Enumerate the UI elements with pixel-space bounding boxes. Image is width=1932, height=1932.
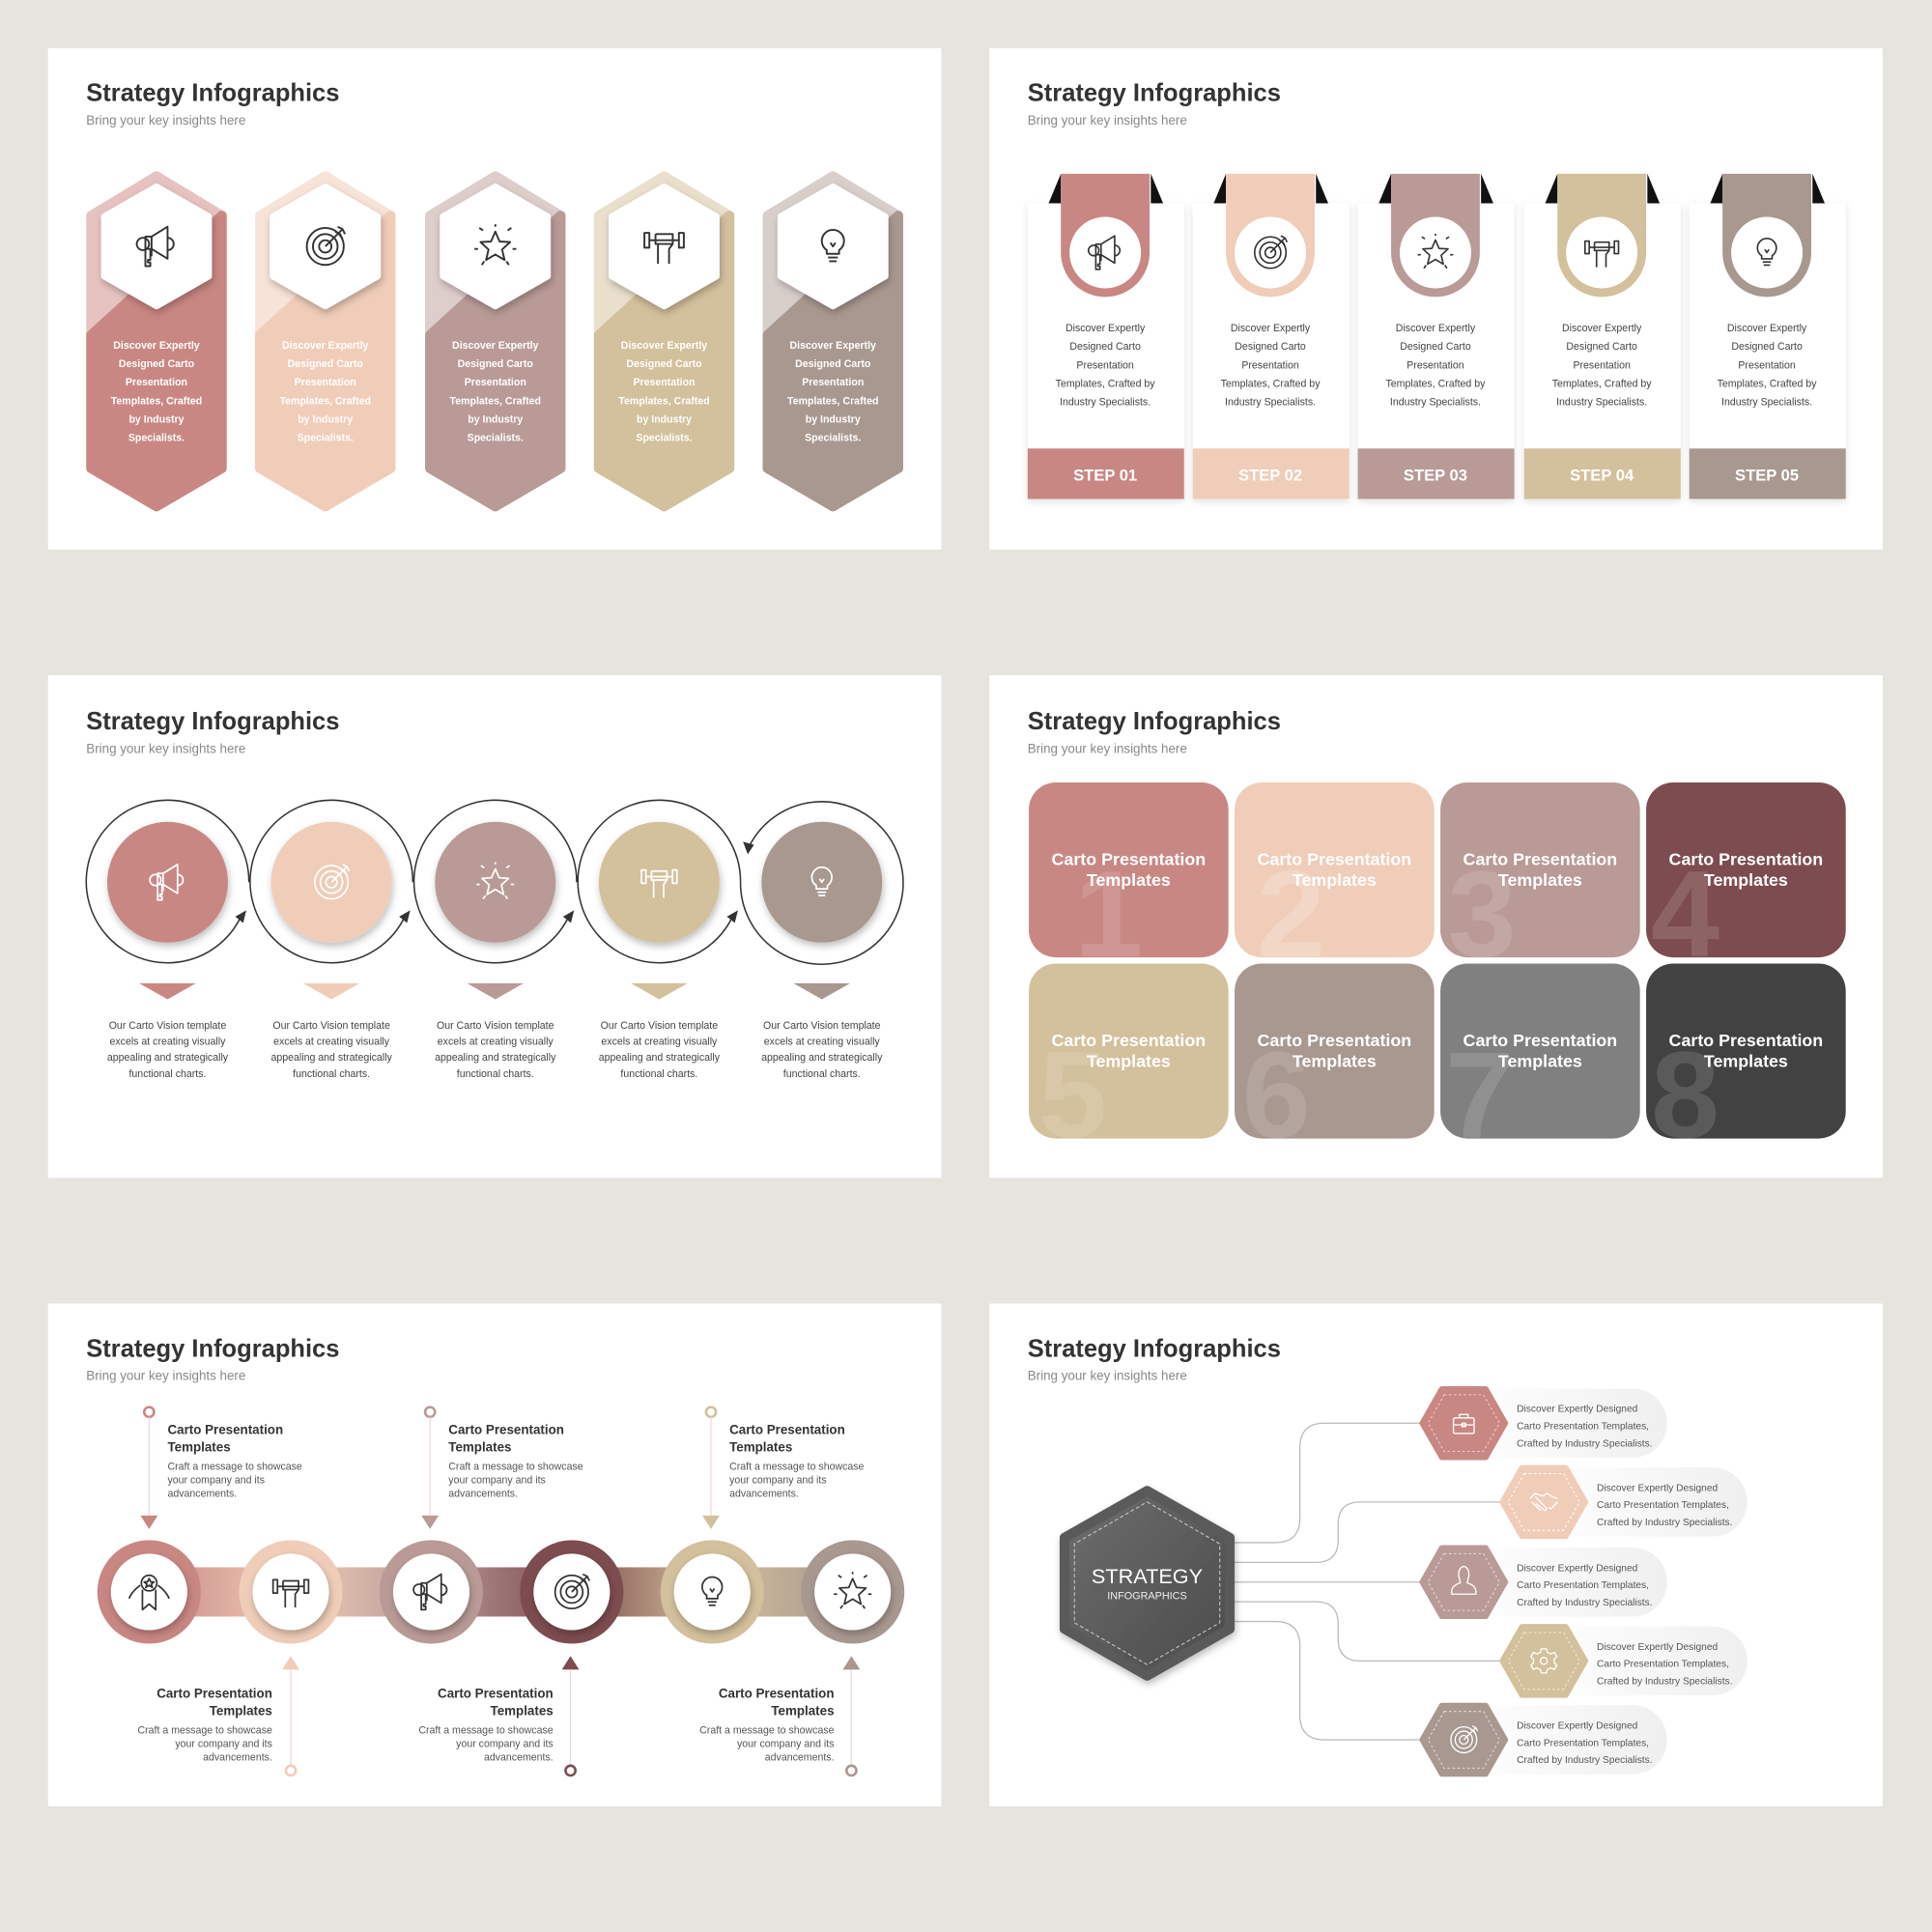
card 3: STEP 03 [1404,466,1467,484]
callout bottom 3: Carto Presentation [719,1687,835,1701]
hex 2: Presentation [295,377,356,388]
card 2: STEP 02 [1238,466,1302,484]
circle 5: Our Carto Vision template [763,1020,881,1032]
title: Strategy Infographics [86,708,339,735]
tile 8 [1646,963,1846,1164]
circle 2 [270,822,392,1080]
tile 5: Templates [1087,1052,1171,1071]
hex 2: Specialists. [298,433,354,444]
circle 5 [761,822,883,1080]
panel: numbered tiles [989,675,1883,1178]
item 2: Carto Presentation Templates, [1597,1500,1729,1511]
circle 2: functional charts. [293,1068,370,1080]
tile 3 [1440,782,1640,983]
chain band [149,1567,853,1616]
callout top 1: Carto Presentation [167,1423,283,1437]
callout top 1 [140,1407,302,1529]
hex 4: by Industry [637,414,692,426]
panel: hexagon columns [48,48,941,550]
tile 8: 8 [1651,1027,1719,1164]
hex 3: Designed Carto [458,358,533,370]
tile 4: Templates [1704,870,1788,890]
tile 2: 2 [1257,846,1325,983]
tile 6 [1235,963,1435,1164]
tile 4: 4 [1651,846,1719,983]
node 1 [98,1540,201,1644]
tile 2: Carto Presentation [1258,849,1411,868]
callout top 1: advancements. [167,1489,237,1500]
node 5 [661,1540,764,1644]
hex 4: Templates, Crafted [618,395,710,407]
tile 4: Carto Presentation [1669,849,1823,868]
subtitle: Bring your key insights here [1028,741,1187,755]
hex 3: Discover Expertly [452,340,539,352]
panel: circle cycle [48,675,941,1178]
circle 4: functional charts. [620,1068,697,1080]
item 5: Carto Presentation Templates, [1517,1738,1649,1748]
circle 1: appealing and strategically [107,1052,229,1064]
circle 3: appealing and strategically [435,1052,556,1064]
card 1 [1028,174,1184,499]
item 5 [1422,1705,1667,1775]
item 1: Crafted by Industry Specialists. [1517,1438,1653,1449]
card 3: Designed Carto [1400,341,1471,353]
callout bottom 2: your company and its [456,1739,554,1750]
circle 1: Our Carto Vision template [109,1020,226,1032]
tile 8: Carto Presentation [1669,1031,1823,1050]
hex 2: Templates, Crafted [280,395,371,407]
item 5: Crafted by Industry Specialists. [1517,1755,1653,1766]
callout top 1: your company and its [167,1475,265,1487]
item 2: Crafted by Industry Specialists. [1597,1518,1732,1528]
title: Strategy Infographics [86,80,339,107]
card 4: Presentation [1573,359,1631,371]
card 5 [1690,174,1846,499]
hex 2 [260,176,390,506]
tile 7: 7 [1445,1027,1514,1164]
tile 7: Carto Presentation [1463,1031,1617,1050]
tile 5: Carto Presentation [1052,1031,1206,1050]
circle 4: Our Carto Vision template [601,1020,718,1032]
circle 2: appealing and strategically [270,1052,392,1064]
hex 2: Designed Carto [288,358,363,370]
central hexagon: INFOGRAPHICS [1107,1591,1187,1603]
panel: timeline chain [48,1303,941,1806]
panel: strategy mind map [989,1303,1883,1806]
hex 5: Presentation [802,377,864,388]
hex 1: by Industry [128,414,185,426]
circle 3: functional charts. [457,1068,534,1080]
hex 1 [91,176,222,506]
callout bottom 3: Craft a message to showcase [699,1725,835,1737]
callout bottom 2: Templates [491,1704,554,1719]
central hexagon [1065,1491,1230,1676]
callout top 2: your company and its [448,1475,546,1487]
card 2: Discover Expertly [1231,323,1311,334]
tile 6: Templates [1293,1052,1377,1071]
hex 4: Presentation [633,377,696,388]
circle 3 [435,822,556,1080]
item 2: Discover Expertly Designed [1597,1483,1719,1493]
card 1: Designed Carto [1069,341,1141,353]
card 1: Discover Expertly [1065,323,1146,334]
circle 4: excels at creating visually [601,1037,718,1048]
callout bottom 3: Templates [771,1704,835,1719]
callout bottom 3: advancements. [765,1752,835,1764]
callout bottom 1: Craft a message to showcase [138,1725,272,1737]
hex 3: Specialists. [468,433,524,444]
panel: step cards [989,48,1883,550]
card 2 [1193,174,1350,499]
callout bottom 2 [418,1656,579,1776]
callout top 3 [702,1407,865,1529]
hex 3: Templates, Crafted [450,395,541,407]
callout top 1: Craft a message to showcase [167,1462,302,1473]
item 3: Discover Expertly Designed [1517,1563,1638,1574]
title: Strategy Infographics [1028,80,1281,107]
callout top 3: your company and its [729,1475,827,1487]
tile 3: 3 [1448,846,1517,983]
card 3: Presentation [1406,359,1464,371]
tile 7: Templates [1498,1052,1582,1071]
card 3: Discover Expertly [1396,323,1476,334]
card 1: STEP 01 [1073,466,1137,484]
node 2 [239,1540,343,1644]
card 5: Designed Carto [1731,341,1803,353]
item 3: Crafted by Industry Specialists. [1517,1598,1653,1608]
card 4: Designed Carto [1566,341,1637,353]
hex 3: by Industry [468,414,523,426]
callout bottom 1: Carto Presentation [156,1687,272,1701]
card 4: STEP 04 [1570,466,1634,484]
card 5: Industry Specialists. [1721,397,1812,409]
circle 1: excels at creating visually [109,1037,226,1048]
callout top 2: Carto Presentation [448,1423,564,1437]
tile 6: 6 [1242,1027,1311,1164]
card 1: Industry Specialists. [1060,397,1151,409]
hex 1: Presentation [126,377,187,388]
card 5: STEP 05 [1735,466,1799,484]
card 3 [1358,174,1515,499]
subtitle: Bring your key insights here [86,741,245,755]
title: Strategy Infographics [1028,708,1281,735]
circle 4 [599,822,721,1080]
item 1 [1422,1389,1667,1458]
callout top 3: advancements. [729,1489,799,1500]
tile 7 [1440,963,1640,1164]
hex 3 [430,176,560,506]
circle 3: Our Carto Vision template [437,1020,554,1032]
central hexagon: STRATEGY [1092,1564,1203,1588]
callout bottom 1 [138,1656,299,1776]
hex 5: by Industry [806,414,861,426]
hex 1: Discover Expertly [113,340,200,352]
item 4 [1502,1627,1747,1695]
card 1: Templates, Crafted by [1056,379,1155,390]
tile 4 [1646,782,1846,983]
item 2 [1502,1467,1747,1537]
subtitle: Bring your key insights here [86,113,245,128]
hex 4: Specialists. [636,433,693,444]
item 4: Crafted by Industry Specialists. [1597,1677,1732,1688]
subtitle: Bring your key insights here [1028,113,1187,128]
callout bottom 1: Templates [210,1704,272,1719]
callout bottom 2: Craft a message to showcase [418,1725,554,1737]
hex 2: Discover Expertly [282,340,369,352]
hex 3: Presentation [465,377,526,388]
item 1: Carto Presentation Templates, [1517,1422,1649,1433]
circle 1: functional charts. [128,1068,206,1080]
callout bottom 3: your company and its [737,1739,835,1750]
card 2: Templates, Crafted by [1221,379,1321,390]
hex 5: Designed Carto [795,358,871,370]
node 6 [801,1540,904,1644]
card 2: Industry Specialists. [1225,397,1316,409]
tile 3: Templates [1498,870,1582,890]
hex 4: Discover Expertly [621,340,707,352]
card 5: Presentation [1738,359,1796,371]
node 3 [380,1540,483,1644]
hex 1: Templates, Crafted [111,395,202,407]
tile 2 [1235,782,1435,983]
circle 3: excels at creating visually [438,1037,554,1048]
hex 4 [599,176,729,506]
callout top 2 [421,1407,583,1529]
tile 2: Templates [1293,870,1377,890]
tile 6: Carto Presentation [1258,1031,1411,1050]
circle 2: excels at creating visually [273,1037,390,1048]
title: Strategy Infographics [86,1335,339,1362]
callout top 2: Templates [448,1440,511,1455]
callout bottom 1: advancements. [203,1752,272,1764]
callout top 2: Craft a message to showcase [448,1462,583,1473]
item 5: Discover Expertly Designed [1517,1721,1638,1732]
callout bottom 2: advancements. [484,1752,554,1764]
hex 1: Designed Carto [119,358,195,370]
item 4: Carto Presentation Templates, [1597,1660,1729,1670]
node 4 [520,1540,623,1644]
card 2: Presentation [1241,359,1299,371]
card 2: Designed Carto [1235,341,1306,353]
hex 2: by Industry [298,414,353,426]
card 5: Templates, Crafted by [1718,379,1817,390]
card 4: Discover Expertly [1562,323,1642,334]
callout top 3: Craft a message to showcase [729,1462,865,1473]
circle 4: appealing and strategically [599,1052,721,1064]
card 3: Industry Specialists. [1390,397,1481,409]
item 3 [1422,1548,1667,1616]
tile 5 [1029,963,1229,1164]
callout top 1: Templates [167,1440,231,1455]
card 4: Industry Specialists. [1556,397,1647,409]
hex 5: Specialists. [805,433,861,444]
card 4: Templates, Crafted by [1552,379,1652,390]
ring arcs [86,800,903,964]
hex 1: Specialists. [128,433,185,444]
subtitle: Bring your key insights here [1028,1369,1187,1383]
item 4: Discover Expertly Designed [1597,1642,1719,1653]
tile 8: Templates [1704,1052,1788,1071]
circle 1 [107,822,229,1080]
callout top 3: Carto Presentation [729,1423,845,1437]
circle 2: Our Carto Vision template [272,1020,390,1032]
card 3: Templates, Crafted by [1386,379,1486,390]
hex 5: Templates, Crafted [787,395,878,407]
circle 5: appealing and strategically [761,1052,883,1064]
hex 4: Designed Carto [626,358,702,370]
tile 1 [1029,782,1229,983]
item 1: Discover Expertly Designed [1517,1405,1638,1415]
tile 3: Carto Presentation [1463,849,1617,868]
card 4 [1524,174,1681,499]
callout bottom 3 [699,1656,860,1776]
callout top 3: Templates [729,1440,792,1455]
connectors [1233,1423,1509,1740]
card 1: Presentation [1076,359,1134,371]
tile 1: Carto Presentation [1052,849,1206,868]
hex 5 [768,176,898,506]
circle 5: functional charts. [783,1068,861,1080]
item 3: Carto Presentation Templates, [1517,1580,1649,1591]
circle 5: excels at creating visually [764,1037,880,1048]
card 5: Discover Expertly [1727,323,1807,334]
callout bottom 1: your company and its [175,1739,272,1750]
hex 5: Discover Expertly [790,340,876,352]
title: Strategy Infographics [1028,1335,1281,1362]
callout bottom 2: Carto Presentation [438,1687,554,1701]
subtitle: Bring your key insights here [86,1369,245,1383]
tile 1: Templates [1087,870,1171,890]
callout top 2: advancements. [448,1489,518,1500]
tile 5: 5 [1038,1027,1107,1164]
tile 1: 1 [1074,846,1143,983]
